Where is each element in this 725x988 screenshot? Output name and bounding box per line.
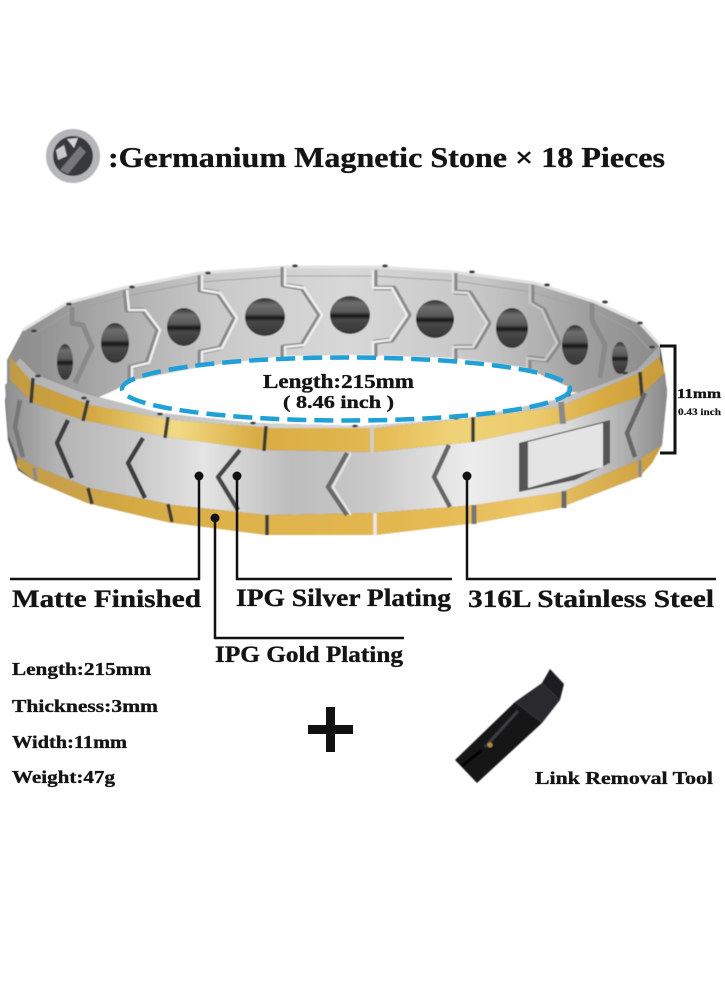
- white opening: [97, 357, 569, 426]
- width dimension bracket: 0.43 inch: [678, 407, 721, 417]
- back inner band: [7, 264, 660, 400]
- front rim dots: [35, 346, 655, 428]
- specifications list: Length:215mm: [12, 659, 151, 679]
- icon: plus: [308, 707, 353, 752]
- length label: [263, 372, 414, 413]
- specifications list: Thickness:3mm: [12, 696, 158, 716]
- front band: [5, 345, 667, 535]
- lower gold strip: [17, 445, 662, 535]
- plate chevron shadows: [72, 267, 605, 385]
- front chevrons: [15, 393, 645, 515]
- specifications list: [12, 659, 158, 787]
- callout: silver plating: [232, 472, 452, 612]
- callout: silver plating: IPG Silver Plating: [236, 585, 452, 612]
- front top rim: [12, 345, 660, 428]
- heading text: :Germanium Magnetic Stone × 18 Pieces: [108, 142, 665, 174]
- callout: matte finished: [10, 472, 204, 613]
- magnetic stones: [57, 296, 628, 380]
- main silver strip: [5, 373, 667, 515]
- callout: stainless steel: [462, 472, 716, 613]
- icon: link removal tool: [455, 669, 564, 783]
- width dimension bracket: [660, 346, 722, 453]
- link gaps: [31, 372, 642, 535]
- length label: ( 8.46 inch ): [283, 392, 394, 413]
- width dimension bracket: 11mm: [677, 386, 722, 401]
- bracelet photo: [5, 264, 667, 535]
- length label: Length:215mm: [263, 372, 414, 393]
- icon: magnetic stone: [46, 129, 100, 183]
- callout: matte finished: Matte Finished: [12, 586, 201, 613]
- callout: gold plating: IPG Gold Plating: [215, 642, 404, 667]
- callout: stainless steel: 316L Stainless Steel: [468, 586, 714, 613]
- clasp: [519, 420, 610, 492]
- title: germanium stone heading: [46, 129, 665, 183]
- dashed circumference ellipse: [122, 358, 570, 420]
- tool label: Link Removal Tool: [535, 768, 713, 788]
- rim dots: [31, 264, 643, 332]
- plate chevron highlights: [127, 267, 557, 385]
- specifications list: Weight:47g: [12, 767, 115, 787]
- callout: gold plating: [210, 514, 404, 667]
- specifications list: Width:11mm: [12, 732, 127, 752]
- upper gold strip: [10, 357, 665, 452]
